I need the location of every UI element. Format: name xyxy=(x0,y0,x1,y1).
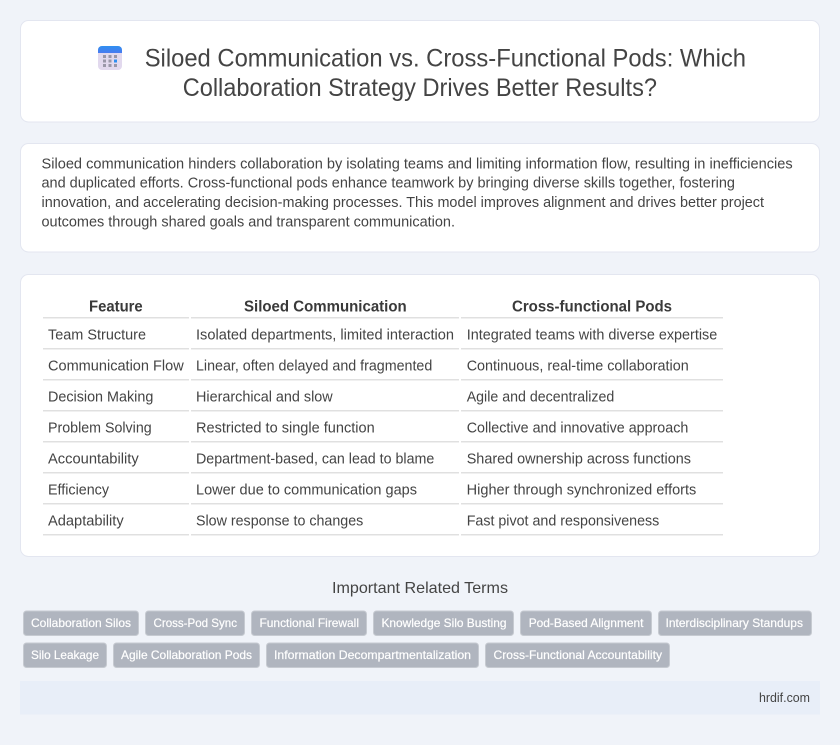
table row: Adaptability xyxy=(43,513,723,536)
table header: Feature xyxy=(89,299,143,316)
tag: Knowledge Silo Busting xyxy=(374,611,514,636)
table row: Team Structure: Integrated teams with diverse expertise xyxy=(467,327,717,343)
tag: Pod-Based Alignment xyxy=(520,611,652,636)
title: Siloed Communication vs. Cross-Functional Pods: Which xyxy=(145,45,746,73)
table row: Communication Flow: Linear, often delayed and fragmented xyxy=(196,358,432,374)
table row: Accountability: Department-based, can lead to blame xyxy=(196,451,434,467)
title: Collaboration Strategy Drives Better Results? xyxy=(183,74,657,102)
tag: Interdisciplinary Standups: Interdisciplinary Standups xyxy=(666,616,803,630)
footer: hrdif.com xyxy=(759,690,810,705)
text block: summary paragraph: and duplicated efforts. Cross-functional pods enhance teamwork by bringing diverse skills together, fostering xyxy=(42,176,735,192)
table row: Adaptability: Adaptability xyxy=(48,513,125,529)
table row: Decision Making xyxy=(43,389,723,412)
table header: Siloed Communication xyxy=(244,299,407,316)
text block: summary paragraph xyxy=(42,156,793,231)
table row: Team Structure xyxy=(43,327,723,350)
table row: Problem Solving: Collective and innovative approach xyxy=(467,420,688,436)
footer xyxy=(20,681,820,714)
panel: comparison table xyxy=(20,274,820,556)
tag: Collaboration Silos xyxy=(24,611,138,636)
tag group: related terms xyxy=(24,611,812,668)
tag: Information Decompartmentalization xyxy=(266,643,478,668)
tag: Silo Leakage: Silo Leakage xyxy=(31,648,99,662)
table row: Communication Flow xyxy=(43,358,723,380)
table row: Problem Solving xyxy=(43,420,723,442)
table row: Team Structure: Isolated departments, limited interaction xyxy=(196,327,454,343)
text block: summary paragraph: innovation, and accelerating decision-making processes. This model improves alignment and drives better project xyxy=(42,195,764,211)
table row: Team Structure: Team Structure xyxy=(48,327,146,343)
tag: Collaboration Silos: Collaboration Silos xyxy=(31,616,131,630)
tag: Knowledge Silo Busting: Knowledge Silo Busting xyxy=(382,616,506,630)
table row: Problem Solving: Restricted to single function xyxy=(196,420,375,436)
tag: Pod-Based Alignment: Pod-Based Alignment xyxy=(529,616,644,630)
table row: Efficiency: Lower due to communication gaps xyxy=(196,482,417,498)
table row: Problem Solving: Problem Solving xyxy=(48,420,152,436)
title xyxy=(145,45,746,102)
table row: Decision Making: Agile and decentralized xyxy=(467,389,614,405)
table row: Communication Flow: Communication Flow xyxy=(48,358,184,374)
tag: Cross-Functional Accountability: Cross-Functional Accountability xyxy=(494,648,662,662)
table row: Decision Making: Hierarchical and slow xyxy=(196,389,333,405)
table row: Efficiency: Higher through synchronized efforts xyxy=(467,482,696,498)
table row: Accountability xyxy=(43,451,723,474)
tag: Agile Collaboration Pods: Agile Collaboration Pods xyxy=(121,648,252,662)
icon: calendar xyxy=(98,46,122,70)
table row: Communication Flow: Continuous, real-time collaboration xyxy=(467,358,689,374)
tag: Silo Leakage xyxy=(24,643,106,668)
tag: Functional Firewall xyxy=(252,611,366,636)
panel: summary xyxy=(20,144,820,252)
tag: Agile Collaboration Pods xyxy=(114,643,260,668)
text block: summary paragraph: Siloed communication hinders collaboration by isolating teams and limiting information flow, resulting in inefficiencies xyxy=(42,156,793,172)
table row: Efficiency: Efficiency xyxy=(48,482,110,498)
table row: Adaptability: Fast pivot and responsiveness xyxy=(467,513,659,529)
tag: Cross-Functional Accountability xyxy=(486,643,670,668)
table header xyxy=(43,299,723,318)
heading: related terms: Important Related Terms xyxy=(332,580,508,597)
table row: Decision Making: Decision Making xyxy=(48,389,153,405)
tag: Interdisciplinary Standups xyxy=(658,611,812,636)
tag: Cross-Pod Sync xyxy=(146,611,244,636)
table row: Accountability: Shared ownership across functions xyxy=(467,451,691,467)
tag: Functional Firewall: Functional Firewall xyxy=(260,616,359,630)
table row: Adaptability: Slow response to changes xyxy=(196,513,363,529)
table row: Efficiency xyxy=(43,482,723,504)
tag: Information Decompartmentalization: Information Decompartmentalization xyxy=(274,648,471,662)
table header: Cross-functional Pods xyxy=(512,299,672,316)
table row: Accountability: Accountability xyxy=(48,451,140,467)
panel: title card xyxy=(20,20,820,122)
text block: summary paragraph: outcomes through shared goals and transparent communication. xyxy=(42,215,455,231)
tag: Cross-Pod Sync: Cross-Pod Sync xyxy=(154,616,237,630)
